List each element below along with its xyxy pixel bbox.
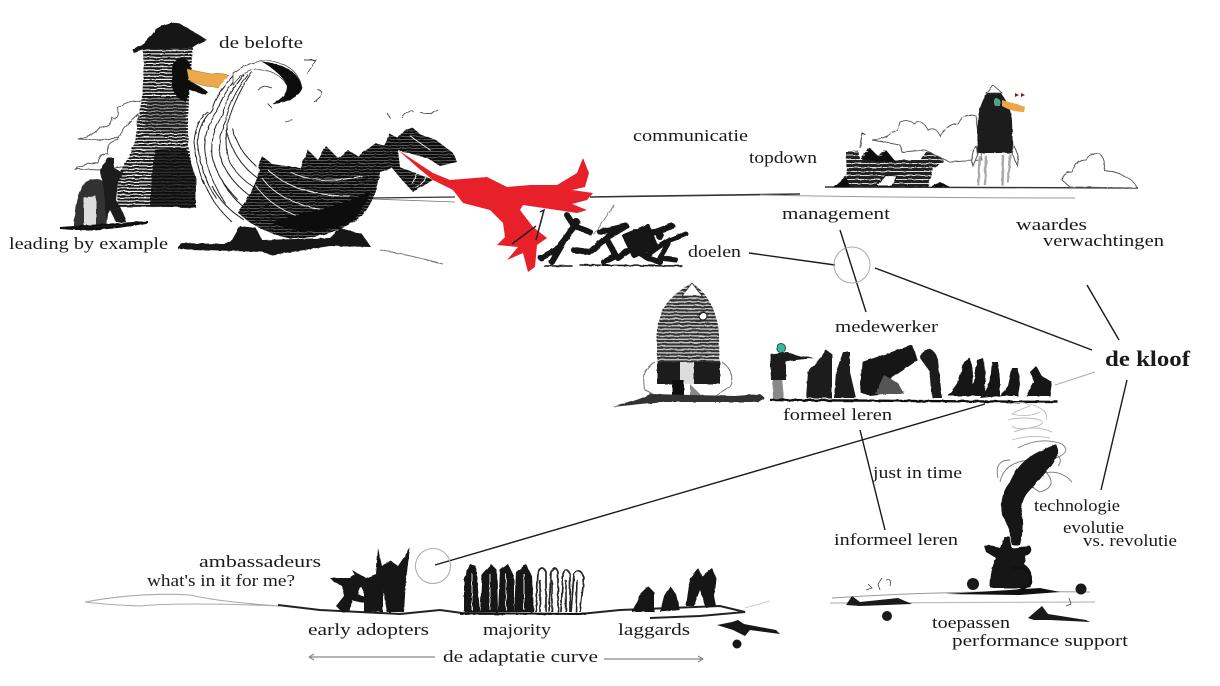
label: medewerker: medewerker xyxy=(835,317,938,336)
fallen figure and rock xyxy=(717,620,780,648)
wheelchair figure xyxy=(984,537,1032,588)
label: toepassen: toepassen xyxy=(932,613,1011,632)
figure in tower window xyxy=(172,58,208,102)
red marks by plume xyxy=(1015,93,1025,97)
castle xyxy=(833,133,950,187)
cannon xyxy=(860,345,918,396)
label: waardes: waardes xyxy=(1016,215,1087,234)
tower roof xyxy=(133,23,207,53)
focus circle: doelen xyxy=(834,247,870,283)
bottom right ground and fallen figures xyxy=(830,578,1095,622)
bottom left ground xyxy=(85,594,770,618)
clouds behind tower xyxy=(75,101,146,170)
label: ambassadeurs: ambassadeurs xyxy=(199,552,321,571)
dragon body xyxy=(212,127,457,238)
connecting lines xyxy=(435,230,1127,565)
label: just in time: just in time xyxy=(872,463,962,482)
orange flame from tower xyxy=(187,69,233,88)
dragon xyxy=(178,60,457,264)
dragon neck hatching xyxy=(193,72,260,218)
tower xyxy=(117,23,208,208)
heading: de kloof: de kloof xyxy=(1105,346,1191,371)
label: laggards: laggards xyxy=(618,620,690,639)
label: verwachtingen: verwachtingen xyxy=(1043,231,1165,250)
horizon lines: top xyxy=(372,187,1138,202)
label: what's in it for me: what's in it for me? xyxy=(147,571,295,590)
label: vs. revolutie: vs. revolutie xyxy=(1083,531,1177,550)
early adopters group xyxy=(330,548,410,612)
seated audience xyxy=(948,358,1052,398)
label: evolutie: evolutie xyxy=(1063,518,1124,537)
label: majority: majority xyxy=(483,620,552,639)
smoke tornado xyxy=(984,402,1072,590)
small black rocket xyxy=(972,85,1018,185)
adaptation curve arrow right xyxy=(604,656,703,662)
clouds by rocket xyxy=(872,115,1137,188)
label: doelen: doelen xyxy=(688,242,742,261)
running crowd xyxy=(541,205,686,266)
dragon legs xyxy=(178,226,371,255)
teacher green head xyxy=(776,344,786,352)
label: technologie: technologie xyxy=(1034,496,1120,515)
label: de adaptatie curve: de adaptatie curve xyxy=(443,647,598,666)
red dragon fire xyxy=(398,150,593,272)
label: topdown: topdown xyxy=(749,148,818,167)
sword in the fire xyxy=(512,210,544,244)
man with gravestone xyxy=(60,158,148,229)
large striped rocket xyxy=(612,283,764,407)
laggards group xyxy=(632,568,716,612)
label: formeel leren: formeel leren xyxy=(783,405,893,424)
label: de belofte: de belofte xyxy=(219,33,303,52)
label: leading by example: leading by example xyxy=(9,234,168,253)
dragon tail curl xyxy=(233,61,302,104)
cheering figures xyxy=(352,548,410,612)
teacher and audience with cannon xyxy=(770,344,1058,402)
focus circle: ambassadeurs xyxy=(416,548,450,584)
standing pupils xyxy=(806,349,942,398)
dragon motion marks xyxy=(258,60,438,122)
label: performance support: performance support xyxy=(952,631,1128,650)
label: communicatie: communicatie xyxy=(633,126,748,145)
runner xyxy=(330,574,372,612)
label: management: management xyxy=(782,204,890,223)
orange plume from black rocket xyxy=(1002,100,1025,112)
majority crowd xyxy=(460,564,586,614)
label: informeel leren: informeel leren xyxy=(834,530,959,549)
label: early adopters: early adopters xyxy=(308,620,429,639)
adaptation curve arrow left xyxy=(309,654,435,660)
